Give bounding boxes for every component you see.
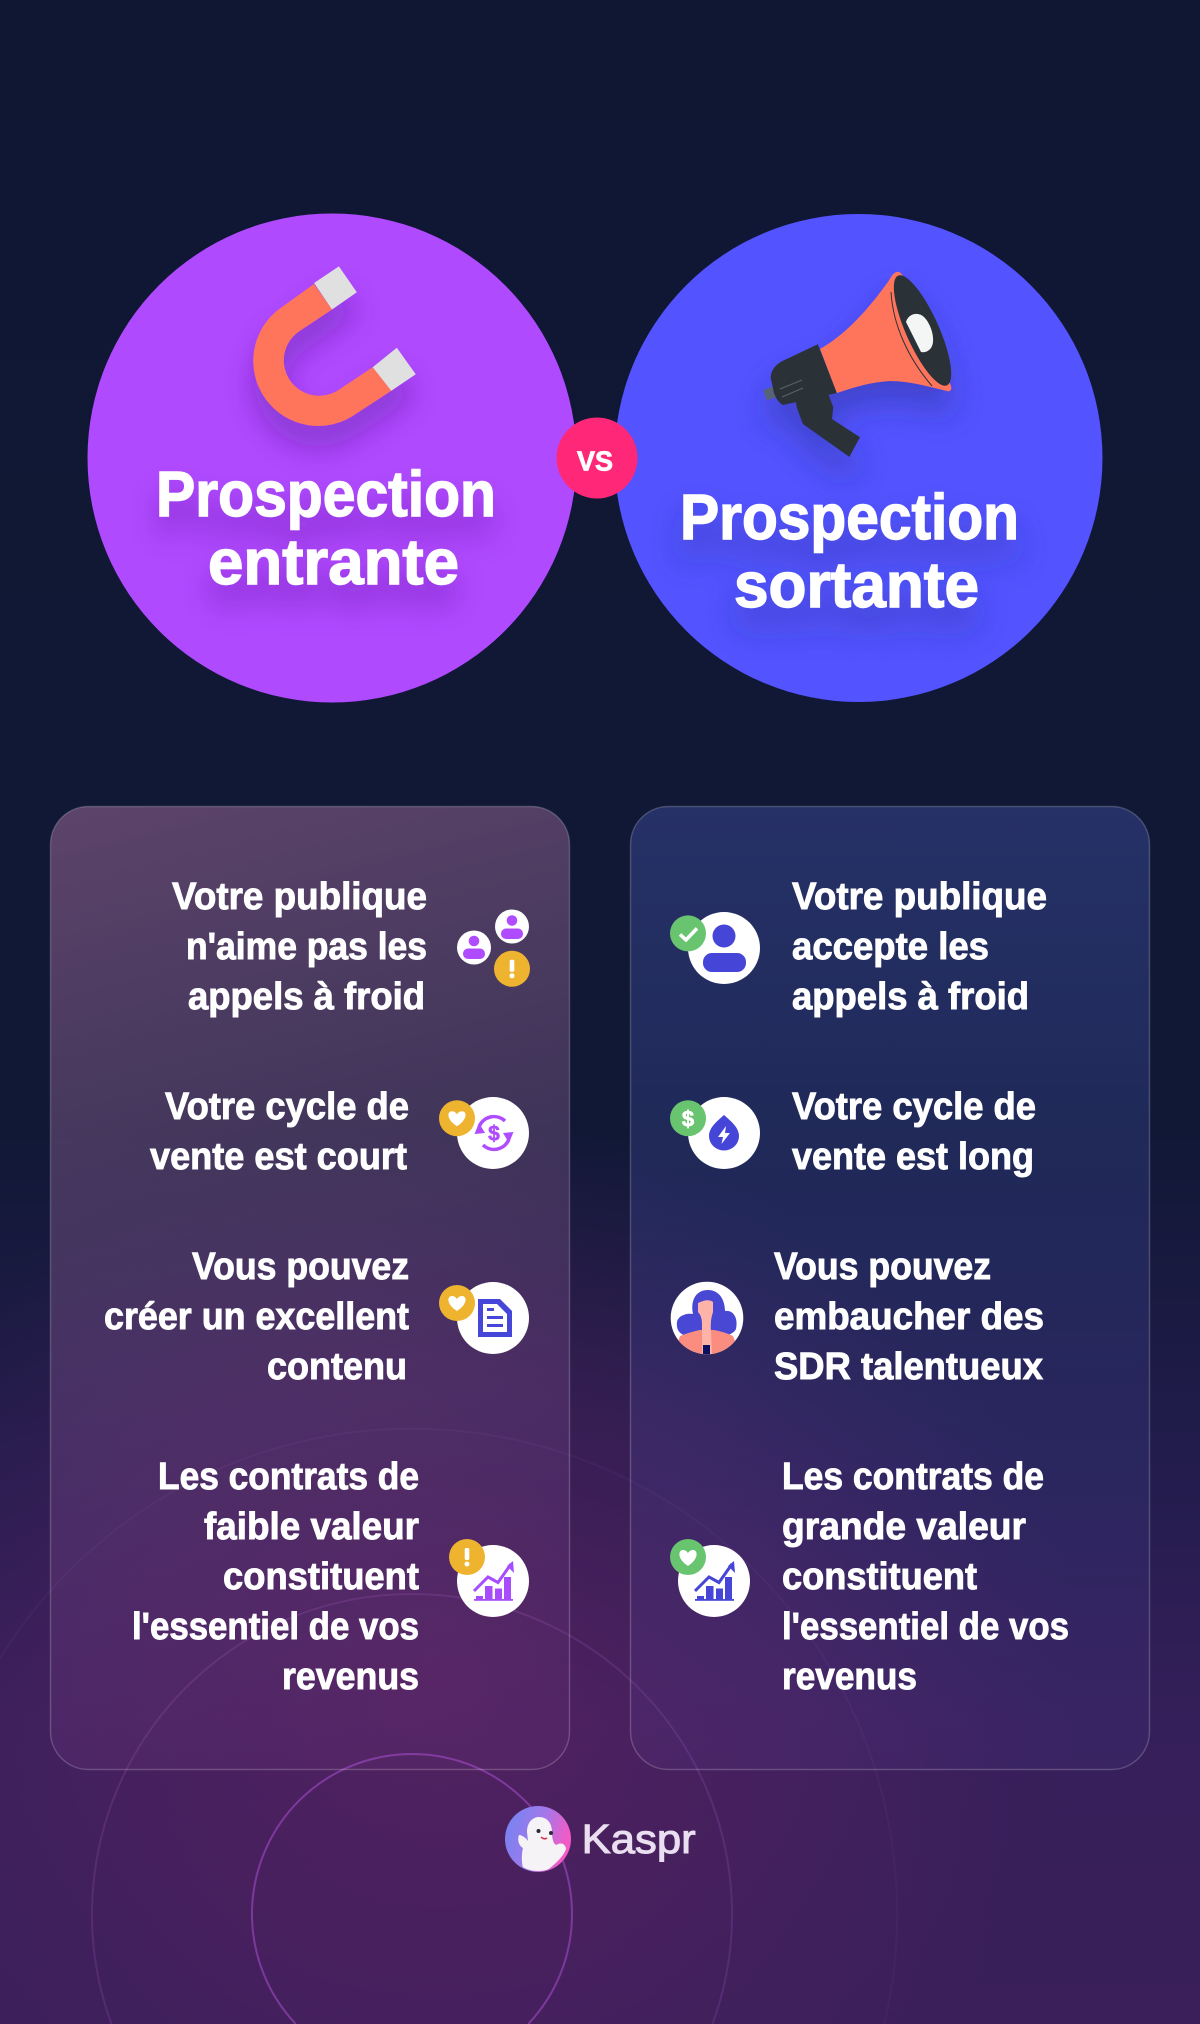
wordmark: Kaspr <box>582 1816 696 1862</box>
text: cycle court: Votre cycle de <box>165 1086 409 1128</box>
text: contrats grande valeur: constituent <box>782 1556 977 1598</box>
text: contrats faible valeur: l'essentiel de vos <box>132 1606 419 1648</box>
badge: VS: VS <box>577 446 613 476</box>
icon: dollar cycle with heart <box>439 1097 529 1169</box>
text: SDR talentueux <box>774 1246 1044 1388</box>
icon: growth chart with heart <box>670 1539 750 1617</box>
text: contrats faible valeur <box>132 1456 419 1698</box>
icon: document with heart <box>439 1282 529 1354</box>
text: cycle court: vente est court <box>150 1136 407 1178</box>
heading: Prospection entrante <box>156 458 496 598</box>
text: contrats faible valeur: Les contrats de <box>158 1456 419 1498</box>
text: cycle long: vente est long <box>792 1136 1034 1178</box>
text: public n'aime pas: n'aime pas les <box>186 926 427 968</box>
icon: two users with warning <box>457 910 530 987</box>
text: contrats grande valeur: l'essentiel de vos <box>782 1606 1069 1648</box>
text: contrats grande valeur: grande valeur <box>782 1506 1026 1548</box>
text: contrats faible valeur: constituent <box>223 1556 419 1598</box>
text: public accepte: accepte les <box>792 926 989 968</box>
decorative concentric circles <box>0 1429 897 2024</box>
text: public accepte <box>792 876 1047 1018</box>
heading: Prospection sortante <box>680 481 1019 621</box>
heading: Prospection entrante: entrante <box>208 526 459 598</box>
icon: energy drop with dollar: $ <box>682 1106 694 1131</box>
icon: user with check <box>670 912 760 984</box>
heading: Prospection sortante: sortante <box>734 549 979 621</box>
text: contrats grande valeur <box>782 1456 1069 1698</box>
text: public n'aime pas: Votre publique <box>172 876 427 918</box>
panel: inbound conditions <box>50 806 570 1770</box>
text: contrats faible valeur: revenus <box>282 1656 419 1698</box>
text: SDR talentueux: Vous pouvez <box>774 1246 991 1288</box>
text: contrats faible valeur: faible valeur <box>204 1506 419 1548</box>
text: cycle long <box>792 1086 1036 1178</box>
text: public n'aime pas: appels à froid <box>188 976 425 1018</box>
text: public accepte: appels à froid <box>792 976 1029 1018</box>
badge: VS <box>556 418 638 498</box>
circle: Prospection sortante <box>614 214 1102 702</box>
heading: Prospection sortante: Prospection <box>680 481 1019 553</box>
text: cycle long: Votre cycle de <box>792 1086 1036 1128</box>
text: contenu: Vous pouvez <box>192 1246 409 1288</box>
icon: megaphone <box>763 269 962 457</box>
heading: Prospection entrante: Prospection <box>156 458 496 530</box>
icon: woman avatar <box>671 1282 743 1359</box>
logo: Kaspr <box>505 1806 696 1872</box>
text: contenu: créer un excellent <box>104 1296 409 1338</box>
text: contenu: contenu <box>267 1346 407 1388</box>
text: public n'aime pas <box>172 876 427 1018</box>
icon: magnet <box>253 266 416 426</box>
text: SDR talentueux: SDR talentueux <box>774 1346 1043 1388</box>
circle: Prospection entrante <box>88 214 576 702</box>
icon: growth chart with warning <box>449 1539 529 1617</box>
text: SDR talentueux: embaucher des <box>774 1296 1044 1338</box>
icon: ghost <box>505 1806 571 1872</box>
icon: energy drop with dollar <box>670 1097 760 1169</box>
text: cycle court <box>150 1086 409 1178</box>
text: contrats grande valeur: Les contrats de <box>782 1456 1044 1498</box>
text: contenu <box>104 1246 409 1388</box>
panel: outbound conditions <box>630 806 1150 1770</box>
text: contrats grande valeur: revenus <box>782 1656 917 1698</box>
text: public accepte: Votre publique <box>792 876 1047 918</box>
icon: dollar cycle with heart: $ <box>488 1122 500 1146</box>
